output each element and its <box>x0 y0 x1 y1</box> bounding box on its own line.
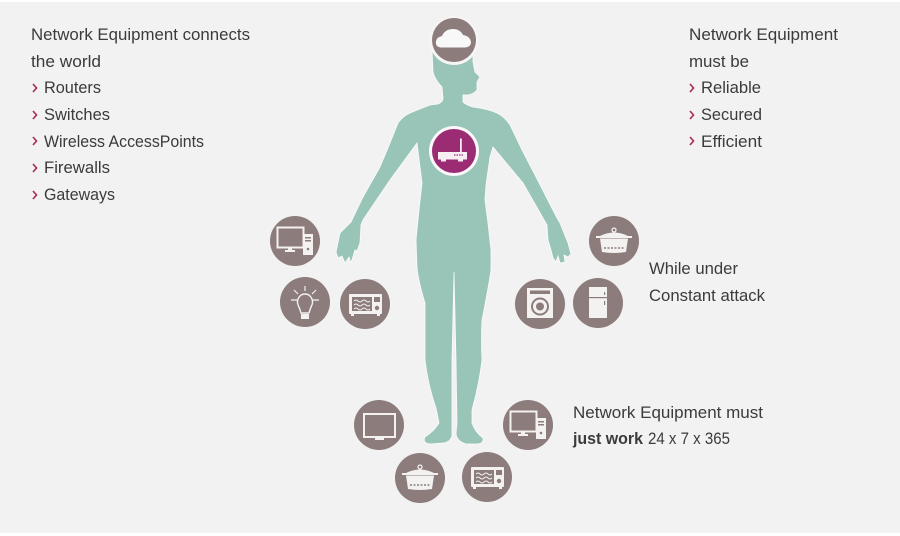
text block: must just work: Network Equipment must <box>573 404 763 422</box>
text block: network equipment must be: Reliable <box>701 79 761 97</box>
icon: computer, upper left <box>270 216 320 266</box>
text block: network equipment connects the world: the world <box>31 53 101 71</box>
text block: network equipment must be: Efficient <box>701 133 762 151</box>
icon: cooking pot, bottom <box>395 453 445 503</box>
icon: cooking pot, right <box>589 216 639 266</box>
icon: microwave, bottom <box>462 452 512 502</box>
text block: network equipment connects the world <box>31 26 250 204</box>
text block: network equipment connects the world: Switches <box>44 106 110 124</box>
text block: network equipment must be: Secured <box>701 106 762 124</box>
text block: while under constant attack: While under <box>649 260 739 278</box>
icon: computer, lower right <box>503 400 553 450</box>
text block: network equipment connects the world: Network Equipment connects <box>31 26 250 44</box>
text block: network equipment connects the world: Routers <box>44 79 101 97</box>
icon: microwave, upper left <box>340 279 390 329</box>
text block: must just work: just work <box>572 430 644 448</box>
human body silhouette <box>336 50 571 444</box>
text block: must just work: 24 x 7 x 365 <box>648 430 730 448</box>
text block: network equipment connects the world: Gateways <box>44 186 115 204</box>
icon: fridge <box>573 278 623 328</box>
icon: cloud <box>430 16 478 65</box>
text block: network equipment connects the world: Firewalls <box>44 159 110 177</box>
text block: while under constant attack: Constant attack <box>649 287 766 305</box>
icon: light bulb <box>280 277 330 327</box>
text block: while under constant attack <box>649 260 766 305</box>
text block: network equipment must be <box>689 26 838 151</box>
icon: television <box>354 400 404 450</box>
text block: network equipment must be: Network Equipment <box>689 26 838 44</box>
icon: washing machine <box>515 279 565 329</box>
icon: router <box>429 126 479 176</box>
text block: network equipment must be: must be <box>689 53 749 71</box>
text block: network equipment connects the world: Wireless AccessPoints <box>44 133 204 151</box>
text block: must just work <box>572 404 763 448</box>
